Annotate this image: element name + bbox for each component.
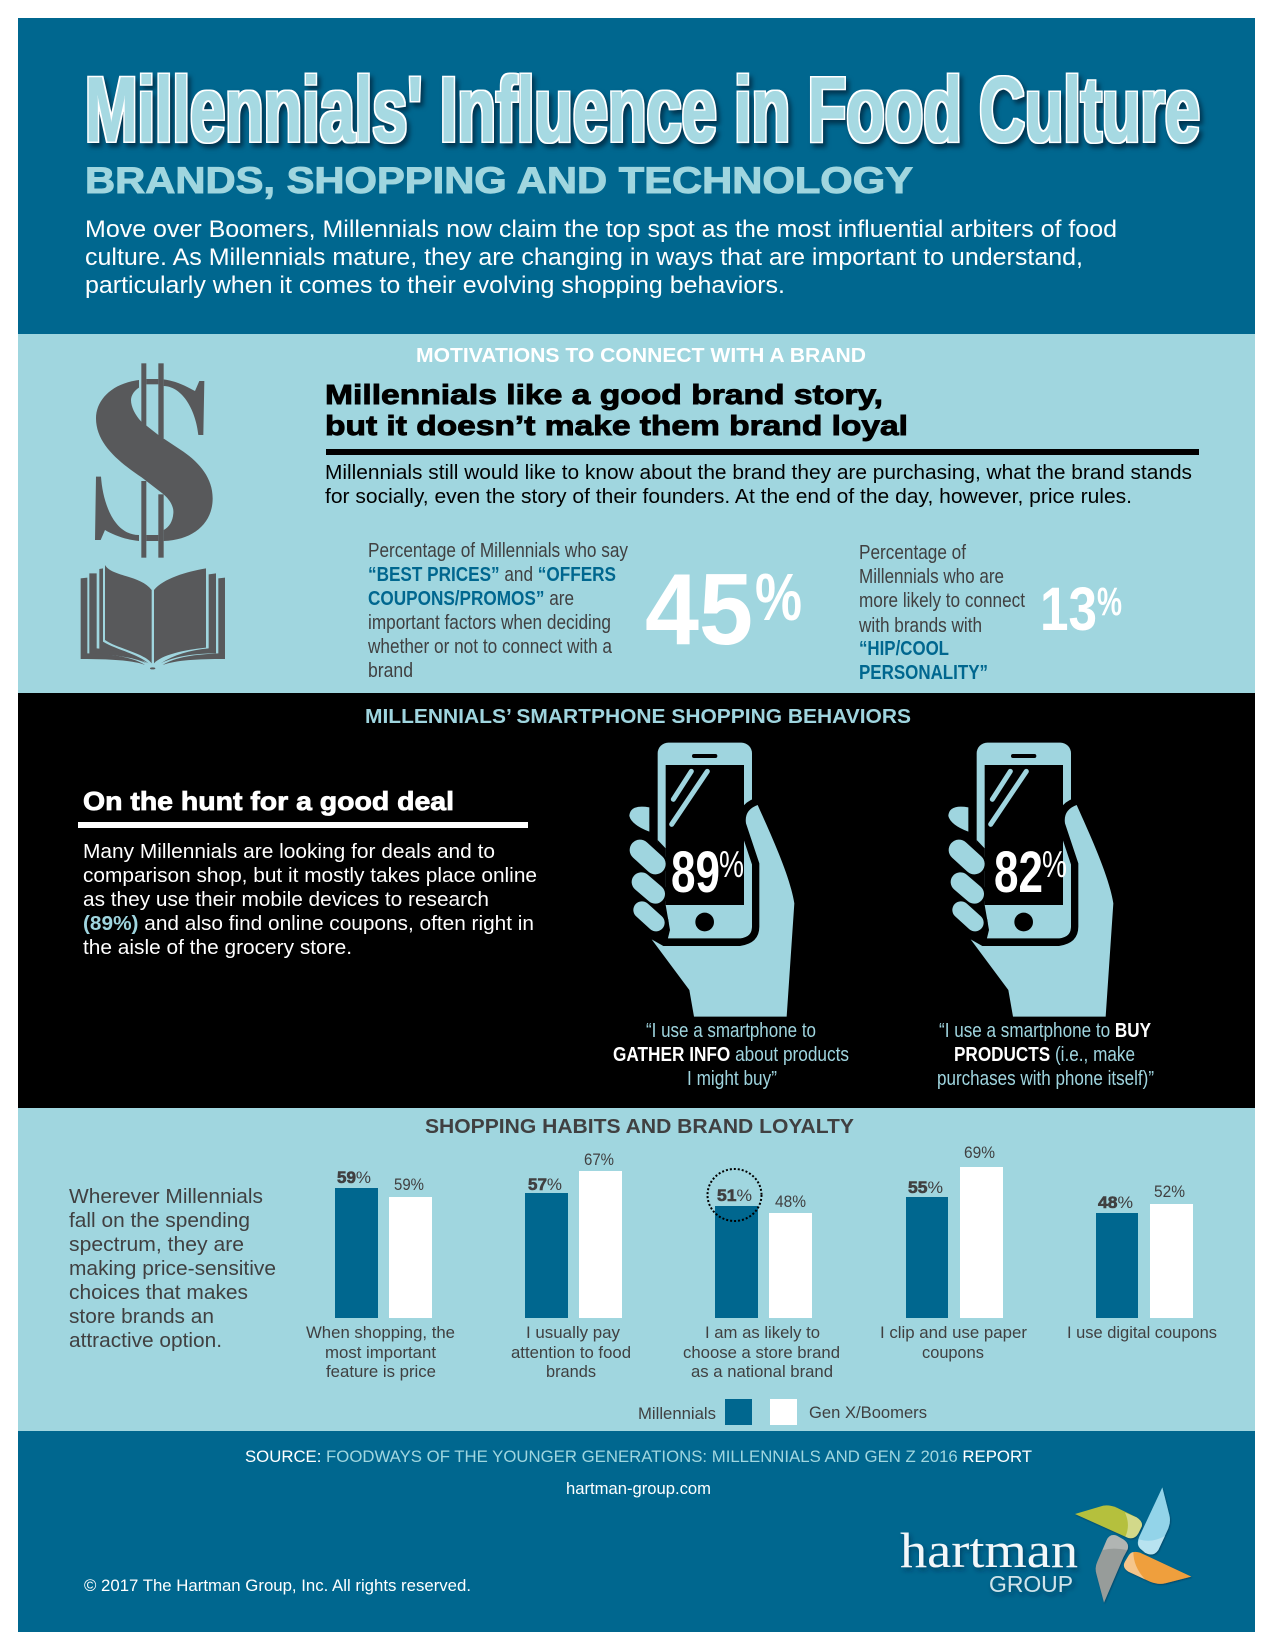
stat text: best prices: whether or not to connect with a — [367, 635, 612, 658]
copyright: © 2017 The Hartman Group, Inc. All rights reserved. — [84, 1577, 471, 1595]
bars group 2: food brands: I usually pay — [526, 1323, 620, 1342]
icon: pinwheel — [1075, 1487, 1191, 1603]
bars group 5: digital coupons: I use digital coupons — [1067, 1323, 1217, 1342]
caption: buy products: PRODUCTS (i.e., make — [954, 1043, 1135, 1066]
stat text: hip cool personality — [858, 541, 1025, 684]
brand story paragraph — [325, 461, 1192, 508]
bars group 1: price: 59% — [337, 1169, 371, 1187]
good deal paragraph: comparison shop, but it mostly takes place online — [83, 864, 537, 887]
stat text: hip cool personality: more likely to connect — [859, 589, 1025, 612]
stat: 45 percent: 45 — [645, 554, 753, 666]
stat: 82 percent: % — [1042, 844, 1067, 885]
heading: brand story: but it doesn’t make them brand loyal — [325, 410, 908, 441]
good deal paragraph: (89%) and also find online coupons, often right in — [83, 912, 534, 935]
stat text: best prices — [367, 539, 629, 682]
stat: 89 percent: % — [719, 844, 744, 885]
stat: 89 percent: 89 — [671, 840, 720, 905]
bars group 4: paper coupons: coupons — [922, 1343, 984, 1362]
left text: price sensitive choices: store brands an — [69, 1305, 214, 1328]
bars group 5: digital coupons — [1067, 1183, 1217, 1342]
caption: buy products: “I use a smartphone to BUY — [939, 1019, 1151, 1042]
bars group 3: store brand: 48% — [775, 1193, 806, 1211]
stat: 82 percent: 82 — [994, 840, 1043, 905]
bars group 3: store brand: 51% — [717, 1187, 752, 1205]
caption: gather info: GATHER INFO about products — [613, 1043, 849, 1066]
bars group 3: store brand — [683, 1169, 840, 1381]
stat text: best prices: brand — [368, 659, 413, 682]
bars group 2: food brands: 67% — [584, 1151, 614, 1169]
stat text: best prices: important factors when deciding — [368, 611, 611, 634]
bars group 1: price: feature is price — [326, 1362, 436, 1381]
icon: hand holding phone 2 — [948, 743, 1113, 1017]
website: hartman-group.com — [566, 1480, 711, 1498]
stat text: hip cool personality: “HIP/COOL — [859, 637, 949, 660]
panel: shopping habits and brand loyalty — [18, 1108, 1255, 1431]
panel: header — [18, 18, 1255, 334]
left text: price sensitive choices: fall on the spending — [69, 1209, 250, 1232]
callout: dotted circle — [708, 1169, 762, 1221]
subtitle: BRANDS, SHOPPING AND TECHNOLOGY — [85, 160, 913, 201]
good deal paragraph: the aisle of the grocery store. — [83, 936, 352, 959]
source line: SOURCE: FOODWAYS OF THE YOUNGER GENERATIONS: MILLENNIALS AND GEN Z 2016 REPORT — [245, 1448, 1032, 1466]
bars group 2: food brands: brands — [546, 1362, 596, 1381]
bars group 4: paper coupons — [880, 1144, 1027, 1362]
bars group 4: paper coupons: 69% — [964, 1144, 995, 1162]
legend — [638, 1399, 927, 1425]
logo: hartman group: hartman — [900, 1522, 1078, 1578]
caption: gather info — [613, 1019, 849, 1090]
stat: 13 percent: 13 — [1040, 575, 1097, 643]
left text: price sensitive choices: Wherever Millennials — [69, 1185, 263, 1208]
intro text: culture. As Millennials mature, they are changing in ways that are important to understand, — [85, 244, 1083, 271]
brand story paragraph: Millennials still would like to know about the brand they are purchasing, what the brand stands — [325, 461, 1192, 484]
section heading: shopping habits: SHOPPING HABITS AND BRAND LOYALTY — [425, 1115, 854, 1138]
bars group 1: price: most important — [325, 1343, 436, 1362]
bars group 1: price — [306, 1169, 455, 1381]
bars group 2: food brands — [511, 1151, 631, 1381]
good deal paragraph: as they use their mobile devices to research — [83, 888, 489, 911]
stat text: hip cool personality: with brands with — [858, 614, 982, 637]
stat text: hip cool personality: Percentage of — [859, 541, 966, 564]
panel: motivations to connect with a brand — [18, 334, 1255, 693]
left text: price sensitive choices: choices that makes — [69, 1281, 248, 1304]
bars group 5: digital coupons: 48% — [1098, 1194, 1133, 1212]
section heading: smartphone: MILLENNIALS’ SMARTPHONE SHOPPING BEHAVIORS — [365, 705, 911, 728]
heading: brand story — [325, 379, 908, 441]
stat: 45 percent: % — [755, 560, 802, 635]
bars group 2: food brands: attention to food — [511, 1343, 631, 1362]
icon: hand holding phone 1 — [629, 743, 794, 1017]
bars group 5: digital coupons: 52% — [1154, 1183, 1185, 1201]
bars group 3: store brand: as a national brand — [691, 1362, 833, 1381]
bars group 1: price: 59% — [394, 1176, 424, 1194]
brand story paragraph: for socially, even the story of their founders. At the end of the day, however, price rules. — [325, 485, 1132, 508]
stat text: best prices: “BEST PRICES” and “OFFERS — [368, 563, 616, 586]
intro text: Move over Boomers, Millennials now claim the top spot as the most influential arbiters of food — [85, 216, 1117, 243]
panel: smartphone shopping behaviors — [18, 693, 1255, 1108]
stat text: hip cool personality: PERSONALITY” — [859, 661, 988, 684]
icon: open book — [81, 565, 225, 669]
heading: brand story: Millennials like a good brand story, — [325, 379, 883, 410]
intro text — [85, 216, 1117, 299]
stat text: hip cool personality: Millennials who are — [859, 565, 1004, 588]
icon: dollar sign — [95, 363, 213, 558]
stat: 13 percent: % — [1097, 580, 1122, 624]
caption: gather info: “I use a smartphone to — [646, 1019, 816, 1042]
left text: price sensitive choices: making price-sensitive — [69, 1257, 276, 1280]
bars group 4: paper coupons: 55% — [908, 1179, 943, 1197]
logo: hartman group — [900, 1487, 1191, 1603]
good deal paragraph — [83, 840, 537, 959]
caption: buy products: purchases with phone itself)” — [937, 1067, 1154, 1090]
stat text: best prices: Percentage of Millennials who say — [368, 539, 629, 562]
heading: good deal: On the hunt for a good deal — [83, 786, 454, 816]
bars group 2: food brands: 57% — [528, 1176, 562, 1194]
bars group 1: price: When shopping, the — [306, 1323, 455, 1342]
bar chart — [306, 1144, 1217, 1381]
good deal paragraph: Many Millennials are looking for deals and to — [83, 840, 495, 863]
left text: price sensitive choices: spectrum, they are — [69, 1233, 244, 1256]
legend: Millennials — [638, 1404, 716, 1423]
left text: price sensitive choices — [69, 1185, 276, 1352]
caption: gather info: I might buy” — [687, 1067, 777, 1090]
bars group 3: store brand: I am as likely to — [705, 1323, 820, 1342]
left text: price sensitive choices: attractive option. — [69, 1329, 222, 1352]
panel: footer — [18, 1431, 1255, 1632]
bars group 3: store brand: choose a store brand — [683, 1343, 840, 1362]
logo: hartman group: GROUP — [989, 1571, 1073, 1597]
intro text: particularly when it comes to their evolving shopping behaviors. — [85, 272, 785, 299]
legend: Gen X/Boomers — [809, 1403, 927, 1422]
caption: buy products — [937, 1019, 1154, 1090]
section heading: motivations: MOTIVATIONS TO CONNECT WITH A BRAND — [416, 344, 866, 367]
stat text: best prices: COUPONS/PROMOS” are — [368, 587, 574, 610]
bars group 4: paper coupons: I clip and use paper — [880, 1323, 1027, 1342]
